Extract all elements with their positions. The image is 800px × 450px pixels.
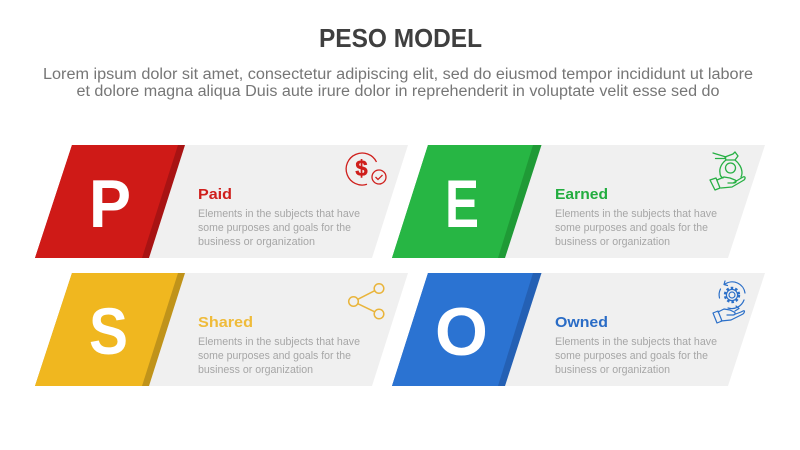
letter E: E (445, 166, 479, 242)
description: earned: Elements in the subjects that have (555, 208, 717, 220)
icon: money bag on hand (710, 152, 745, 190)
description: owned: business or organization (555, 364, 670, 376)
icon: dollar with check (346, 153, 386, 185)
description: earned (555, 208, 717, 248)
heading: owned: Owned (555, 314, 608, 331)
icon: gear on hand (713, 281, 745, 323)
panel: shared (35, 273, 408, 386)
description: paid (198, 208, 360, 248)
heading: shared: Shared (198, 314, 253, 331)
letter P: P (89, 166, 131, 242)
heading: earned: Earned (555, 186, 608, 203)
title: PESO MODEL (319, 23, 482, 53)
description: paid: Elements in the subjects that have (198, 208, 360, 220)
description: owned: some purposes and goals for the (555, 350, 708, 362)
description: paid: business or organization (198, 236, 315, 248)
intro text (43, 66, 753, 100)
intro text: Lorem ipsum dolor sit amet, consectetur adipiscing elit, sed do eiusmod tempor incididunt ut labore (43, 66, 753, 83)
panel: earned (392, 145, 765, 258)
description: shared (198, 336, 360, 376)
intro text: et dolore magna aliqua Duis aute irure dolor in reprehenderit in voluptate velit esse sed do (76, 83, 720, 100)
description: shared: some purposes and goals for the (198, 350, 351, 362)
description: earned: some purposes and goals for the (555, 222, 708, 234)
heading: paid: Paid (198, 186, 232, 203)
icon: share (349, 284, 384, 319)
description: earned: business or organization (555, 236, 670, 248)
letter O: O (435, 294, 488, 370)
description: shared: business or organization (198, 364, 313, 376)
description: paid: some purposes and goals for the (198, 222, 351, 234)
icon: dollar with check: $ (355, 156, 368, 181)
letter S: S (89, 294, 128, 368)
panel: owned (392, 273, 765, 386)
description: shared: Elements in the subjects that have (198, 336, 360, 348)
panel: paid (35, 145, 408, 258)
description: owned (555, 336, 717, 376)
description: owned: Elements in the subjects that have (555, 336, 717, 348)
